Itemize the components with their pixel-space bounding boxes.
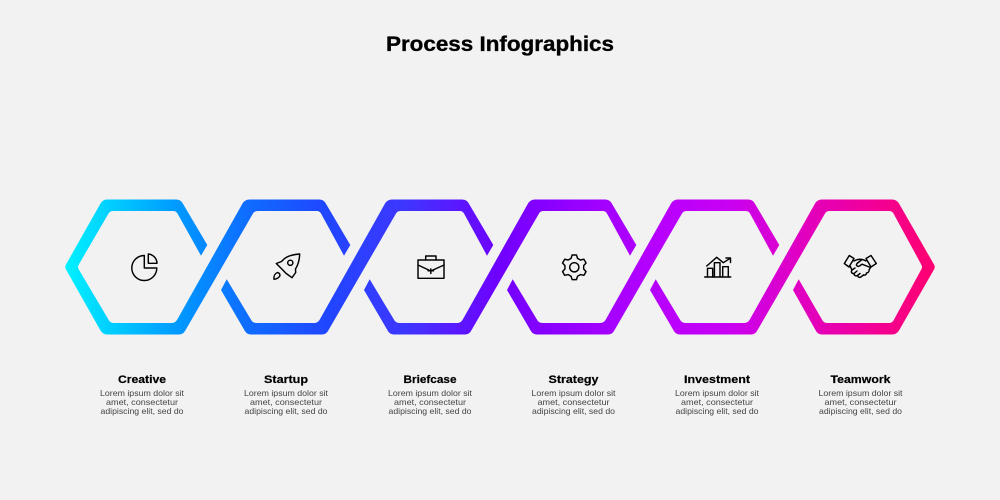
label: Investment: Investment <box>684 374 750 386</box>
label: Briefcase: Briefcase <box>404 374 456 386</box>
label: Teamwork: amet, consectetur <box>824 397 897 407</box>
label: Investment: adipiscing elit, sed do <box>676 406 759 416</box>
label: Teamwork: Lorem ipsum dolor sit <box>818 388 903 398</box>
label: Creative <box>100 374 185 416</box>
label: Briefcase: adipiscing elit, sed do <box>388 406 472 416</box>
label: Startup: amet, consectetur <box>250 397 322 407</box>
label: Investment: amet, consectetur <box>681 397 753 407</box>
label: Creative: Lorem ipsum dolor sit <box>100 388 185 398</box>
label: Startup <box>244 374 329 416</box>
icon: rocket <box>274 254 300 279</box>
label: Creative: Creative <box>118 374 166 386</box>
label: Startup: Lorem ipsum dolor sit <box>244 388 329 398</box>
label: Startup: Startup <box>264 374 308 386</box>
label: Startup: adipiscing elit, sed do <box>244 406 328 416</box>
label: Briefcase: Lorem ipsum dolor sit <box>388 388 473 398</box>
icon: handshake <box>844 256 876 277</box>
label: Creative: amet, consectetur <box>106 397 178 407</box>
label: Briefcase: amet, consectetur <box>394 397 466 407</box>
icon: bar chart with arrow <box>705 257 731 277</box>
label: Strategy <box>532 374 616 416</box>
label: Briefcase <box>388 374 473 416</box>
icon: pie chart <box>132 254 157 280</box>
label: Teamwork: Teamwork <box>830 374 891 386</box>
label: Teamwork: adipiscing elit, sed do <box>819 406 902 416</box>
label: Investment: Lorem ipsum dolor sit <box>675 388 760 398</box>
interlinked hexagon ribbon <box>65 200 935 334</box>
label: Strategy: Lorem ipsum dolor sit <box>532 388 616 398</box>
title: Process Infographics <box>386 32 614 56</box>
label: Teamwork <box>818 374 903 416</box>
label: Strategy: amet, consectetur <box>538 397 610 407</box>
label: Strategy: adipiscing elit, sed do <box>532 406 615 416</box>
label: Strategy: Strategy <box>548 374 599 386</box>
label: Creative: adipiscing elit, sed do <box>100 406 184 416</box>
label: Investment <box>675 374 760 416</box>
icon: gear <box>563 255 586 280</box>
icon: briefcase <box>418 256 444 278</box>
